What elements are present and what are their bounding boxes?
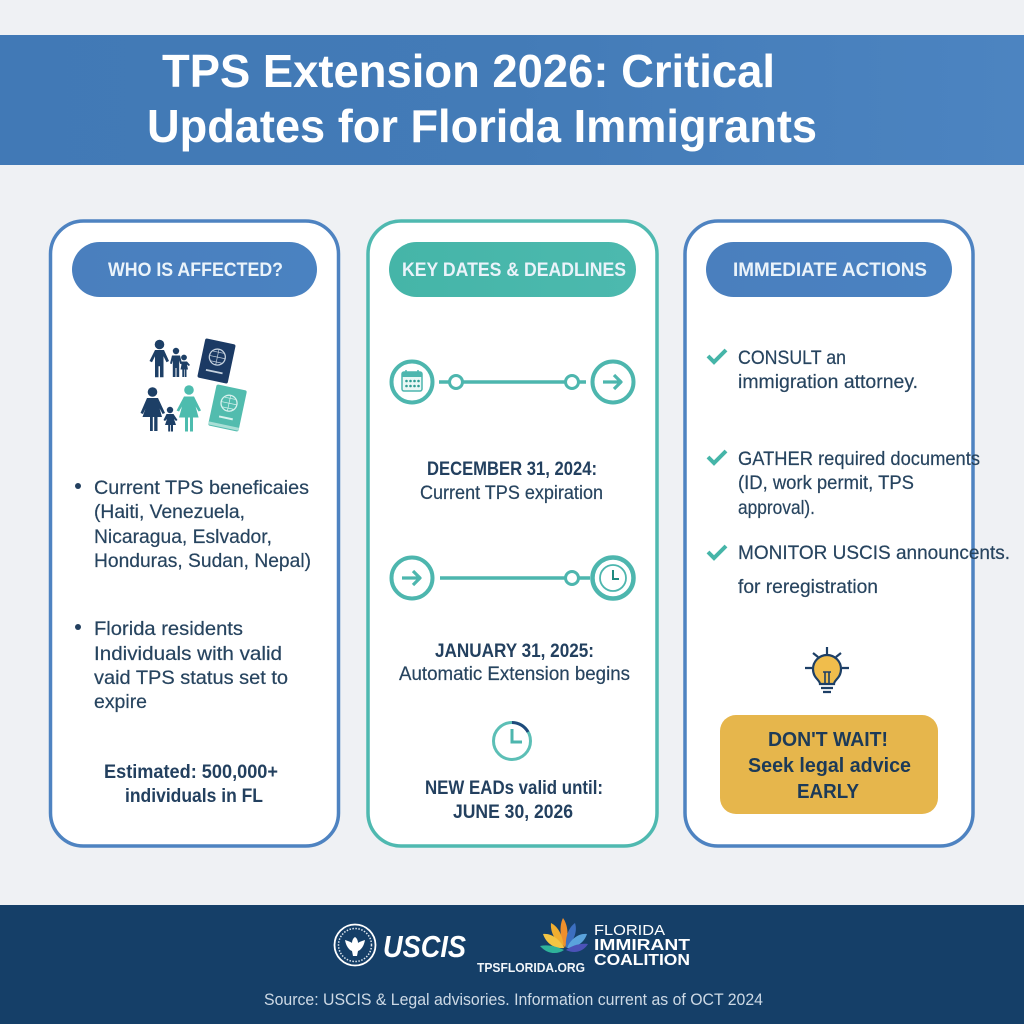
action: consult: immigration attorney. <box>738 371 918 393</box>
bullet list: Florida residents: vaid TPS status set to <box>94 667 288 689</box>
action: consult: CONSULT an <box>738 347 846 369</box>
icon: arrow <box>392 558 432 598</box>
heading pill: immediate actions: IMMEDIATE ACTIONS <box>733 260 927 281</box>
logo: flower <box>540 918 588 953</box>
icon: light bulb <box>805 647 849 692</box>
bullet list: Florida residents <box>75 618 288 713</box>
icon: calendar <box>392 362 432 402</box>
date: January 31 2025: JANUARY 31, 2025: <box>435 641 594 662</box>
date: new EAD validity: NEW EADs valid until: <box>425 778 603 799</box>
title: TPS Extension 2026: Critical <box>162 45 775 97</box>
action: monitor: for reregistration <box>738 576 878 598</box>
logo text: coalition: FLORIDA <box>594 922 665 939</box>
footer <box>0 905 1024 1024</box>
icon: check <box>708 350 726 362</box>
estimate callout <box>104 762 278 807</box>
action: gather <box>708 448 980 519</box>
bullet list: beneficiaries: Honduras, Sudan, Nepal) <box>94 550 311 572</box>
bullet list: Florida residents: Florida residents <box>94 618 243 640</box>
action: gather: approval). <box>738 497 815 519</box>
bullet list: beneficiaries <box>75 477 311 572</box>
website: TPSFLORIDA.ORG <box>477 960 585 975</box>
icon: arrow <box>592 362 634 402</box>
panel: immediate actions <box>685 221 1010 846</box>
bullet list: beneficiaries: Current TPS beneficaies <box>94 477 309 499</box>
logo text: coalition: IMMIRANT <box>594 937 691 954</box>
bullet list: Florida residents: expire <box>94 691 147 713</box>
icon: dark passport <box>197 338 236 384</box>
icon: teal passport <box>208 384 247 432</box>
action: monitor: MONITOR USCIS announcents. <box>738 542 1010 564</box>
action: gather: (ID, work permit, TPS <box>738 472 914 494</box>
bullet list: beneficiaries: Nicaragua, Eslvador, <box>94 526 272 548</box>
heading pill: immediate actions <box>706 242 952 297</box>
action: consult <box>708 347 918 393</box>
estimate callout: individuals in FL <box>125 786 263 807</box>
callout: don't wait <box>720 715 938 814</box>
panel: key dates and deadlines <box>368 221 657 846</box>
icon: clock with progress arc <box>494 722 530 760</box>
logo: USCIS: USCIS <box>383 929 466 964</box>
date: December 31 2024: Current TPS expiration <box>420 483 603 504</box>
icon: clock <box>592 558 634 598</box>
date: January 31 2025: Automatic Extension begins <box>399 664 630 685</box>
action: gather: GATHER required documents <box>738 448 980 470</box>
date: January 31 2025 <box>399 641 630 685</box>
heading pill: key dates <box>389 242 636 297</box>
date: December 31 2024: DECEMBER 31, 2024: <box>427 459 597 480</box>
source line: Source: USCIS & Legal advisories. Information current as of OCT 2024 <box>264 990 763 1009</box>
icon: check <box>708 546 726 558</box>
heading pill: who is affected: WHO IS AFFECTED? <box>108 260 283 281</box>
header banner <box>0 35 1024 165</box>
icon: families and passports <box>140 338 247 432</box>
logo text: coalition: COALITION <box>594 952 690 969</box>
title <box>147 45 817 152</box>
callout: don't wait: EARLY <box>797 780 859 803</box>
date: December 31 2024 <box>420 459 603 504</box>
callout: don't wait: DON'T WAIT! <box>768 728 888 751</box>
timeline: December to extension <box>392 362 634 402</box>
date: new EAD validity <box>425 778 603 823</box>
icon: check <box>708 451 726 463</box>
timeline: extension to clock <box>392 558 634 598</box>
estimate callout: Estimated: 500,000+ <box>104 762 278 783</box>
action: monitor <box>708 542 1010 598</box>
callout: don't wait: Seek legal advice <box>748 754 911 777</box>
title: Updates for Florida Immigrants <box>147 100 817 152</box>
heading pill: who is affected <box>72 242 317 297</box>
bullet list: beneficiaries: (Haiti, Venezuela, <box>94 501 245 523</box>
logo text: coalition <box>594 922 691 969</box>
heading pill: key dates: KEY DATES & DEADLINES <box>402 260 626 281</box>
date: new EAD validity: JUNE 30, 2026 <box>453 802 573 823</box>
logo: USCIS <box>334 924 466 966</box>
bullet list: Florida residents: Individuals with valid <box>94 643 282 665</box>
panel: who is affected <box>50 221 338 846</box>
